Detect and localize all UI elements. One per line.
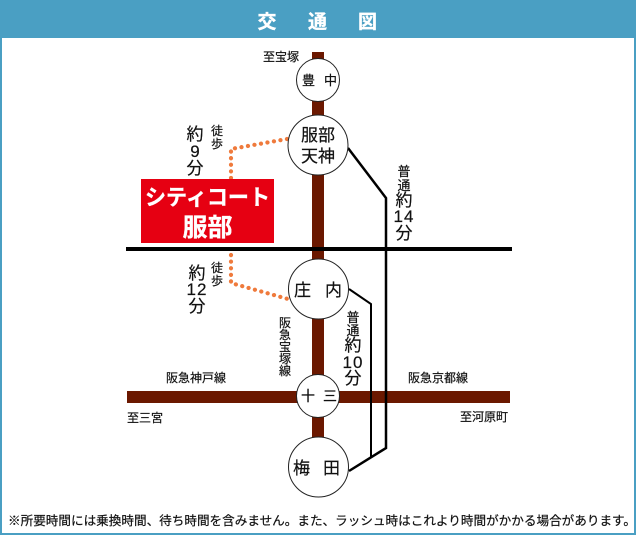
title bar — [0, 0, 636, 38]
station: Umeda: 田 — [323, 459, 340, 478]
station: Hattori-Tenjin: 天神 — [301, 147, 335, 166]
station: Juso — [296, 374, 340, 418]
label: Hankyu Takarazuka Line: 宝 — [279, 340, 291, 354]
label: local 10 minutes — [343, 310, 363, 388]
label: Hankyu Takarazuka Line: 急 — [279, 327, 291, 342]
label: walking 9 minutes: 約 — [186, 125, 204, 144]
label: walking 9 minutes: 歩 — [211, 136, 223, 151]
station: Umeda: 梅 — [293, 459, 310, 478]
callout: property name — [141, 179, 274, 243]
label: walking 12 minutes: 歩 — [211, 273, 223, 288]
title bar: 通 — [308, 11, 327, 33]
label: walking 12 minutes: 徒 — [211, 261, 223, 275]
label: to Sannomiya: 至三宮 — [127, 410, 163, 425]
callout: property name: 服部 — [182, 214, 233, 242]
title bar: 図 — [358, 12, 377, 33]
label: local 10 minutes: 普 — [346, 310, 360, 325]
station: Juso: 十 — [301, 388, 315, 404]
label: Hankyu Takarazuka Line: 阪 — [279, 316, 291, 330]
label: walking 9 minutes — [186, 124, 223, 178]
label: to Kawaramachi: 至河原町 — [460, 410, 508, 424]
label: Hankyu Takarazuka Line: 塚 — [279, 352, 291, 366]
rail line: Hankyu Kobe and Kyoto horizontal — [127, 391, 510, 403]
station: Toyonaka: 中 — [324, 73, 337, 88]
label: walking 12 minutes: 分 — [188, 297, 206, 316]
local route line: Hattori-Tenjin to Umeda — [348, 148, 386, 471]
label: walking 9 minutes: 9 — [190, 142, 200, 161]
station: Toyonaka: 豊 — [302, 73, 315, 88]
label: local 14 minutes: 普 — [397, 164, 411, 179]
station: Umeda — [288, 437, 348, 497]
label: Hankyu Kobe Line: 阪急神戸線 — [166, 370, 226, 385]
label: local 10 minutes: 通 — [346, 323, 360, 338]
label: walking 12 minutes: 12 — [187, 280, 207, 299]
walking route: upper dotted path — [231, 139, 287, 178]
label: local 10 minutes: 10 — [343, 353, 363, 372]
label: walking 9 minutes: 分 — [186, 159, 204, 178]
label: Hankyu Takarazuka Line: 線 — [279, 363, 291, 378]
road: black horizontal line — [126, 247, 512, 251]
station: Juso: 三 — [323, 388, 337, 404]
label: local 14 minutes — [394, 164, 414, 243]
walking route: lower dotted path — [231, 255, 288, 299]
station: Shonai — [288, 259, 348, 319]
label: local 10 minutes: 分 — [344, 369, 362, 388]
station: Toyonaka — [296, 58, 340, 102]
callout: property name: シティコート — [145, 185, 270, 210]
label: local 10 minutes: 約 — [344, 336, 362, 355]
footnote: ※所要時間には乗換時間、待ち時間を含みません。また、ラッシュ時はこれより時間がかかる場合があります。 — [8, 513, 636, 528]
label: local 14 minutes: 分 — [396, 224, 412, 243]
label: Hankyu Takarazuka Line — [279, 316, 291, 378]
station: Shonai: 庄 — [294, 281, 311, 300]
label: walking 9 minutes: 徒 — [211, 124, 223, 138]
label: walking 12 minutes — [187, 261, 223, 316]
station: Hattori-Tenjin: 服部 — [301, 126, 335, 145]
label: local 14 minutes: 14 — [394, 207, 414, 226]
station: Shonai: 内 — [325, 281, 342, 300]
rail line: Hankyu Takarazuka main trunk — [312, 52, 324, 472]
label: local 14 minutes: 約 — [396, 191, 412, 210]
label: Hankyu Kyoto Line: 阪急京都線 — [408, 370, 468, 385]
label: local 14 minutes: 通 — [397, 178, 411, 193]
label: to Takarazuka: 至宝塚 — [263, 50, 299, 64]
label: walking 12 minutes: 約 — [188, 264, 206, 283]
station: Hattori-Tenjin — [288, 115, 348, 175]
local route line: Shonai to Umeda — [349, 289, 371, 458]
title bar: 交 — [258, 11, 277, 33]
